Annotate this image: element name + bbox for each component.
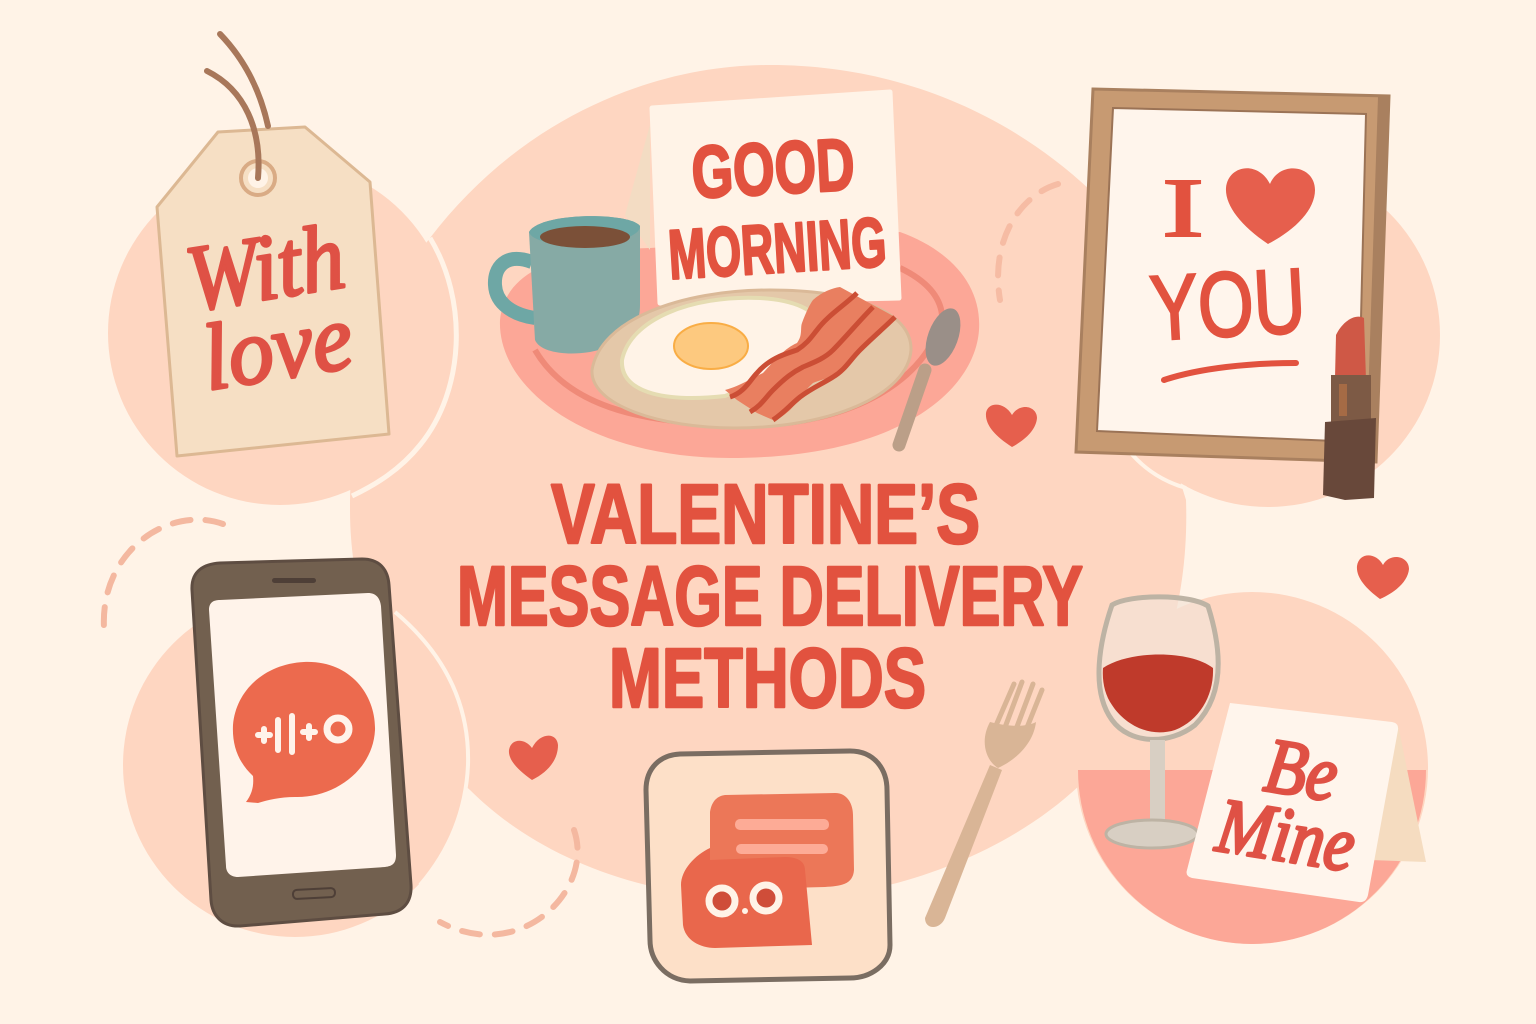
tag text: With love [179, 204, 359, 411]
icon: lipstick [1323, 317, 1376, 500]
dashed path top right [998, 184, 1058, 300]
frame text: I heart you [1148, 162, 1315, 380]
icon: wine glass [1099, 597, 1218, 848]
panel: frame circle [1096, 163, 1440, 507]
icon: gift tag [157, 34, 389, 456]
tag text: With love: love [195, 285, 359, 411]
icon: coffee mug [495, 216, 640, 354]
front bubble [681, 848, 812, 948]
title: MESSAGE DELIVERY [457, 549, 1083, 643]
panel: wine and card circle [1060, 592, 1440, 950]
dashed path left [104, 520, 223, 628]
icon: message app tile [646, 751, 890, 981]
card: be mine: Be [1259, 721, 1344, 818]
icon: framed note [1076, 89, 1389, 462]
panel: gift tag circle [108, 161, 456, 505]
card: be mine [1187, 703, 1426, 902]
central blob background [350, 65, 1186, 900]
icon: spoon [899, 304, 967, 445]
icon: fork [925, 682, 1042, 927]
frame text: I heart you: I [1162, 162, 1204, 255]
title [457, 467, 1083, 725]
title: METHODS [609, 631, 926, 725]
icon: smartphone [192, 559, 411, 926]
icon: plate [592, 290, 911, 428]
panel: phone circle [123, 593, 468, 937]
title: VALENTINE’S [551, 467, 980, 561]
frame text: I heart you: YOU [1148, 250, 1308, 360]
icon: fried egg [622, 298, 822, 398]
card: good morning: MORNING [666, 203, 889, 294]
dashed path bottom [440, 830, 578, 935]
icon: red hearts [509, 405, 1409, 780]
card: good morning: GOOD [689, 123, 857, 214]
card: good morning [625, 92, 899, 303]
chat bubble icon [233, 662, 375, 803]
icon: bacon [725, 287, 895, 420]
icon: breakfast tray [495, 92, 979, 458]
card: be mine: Mine [1210, 781, 1361, 888]
back bubble [710, 793, 854, 890]
tag text: With love: With [179, 204, 351, 332]
